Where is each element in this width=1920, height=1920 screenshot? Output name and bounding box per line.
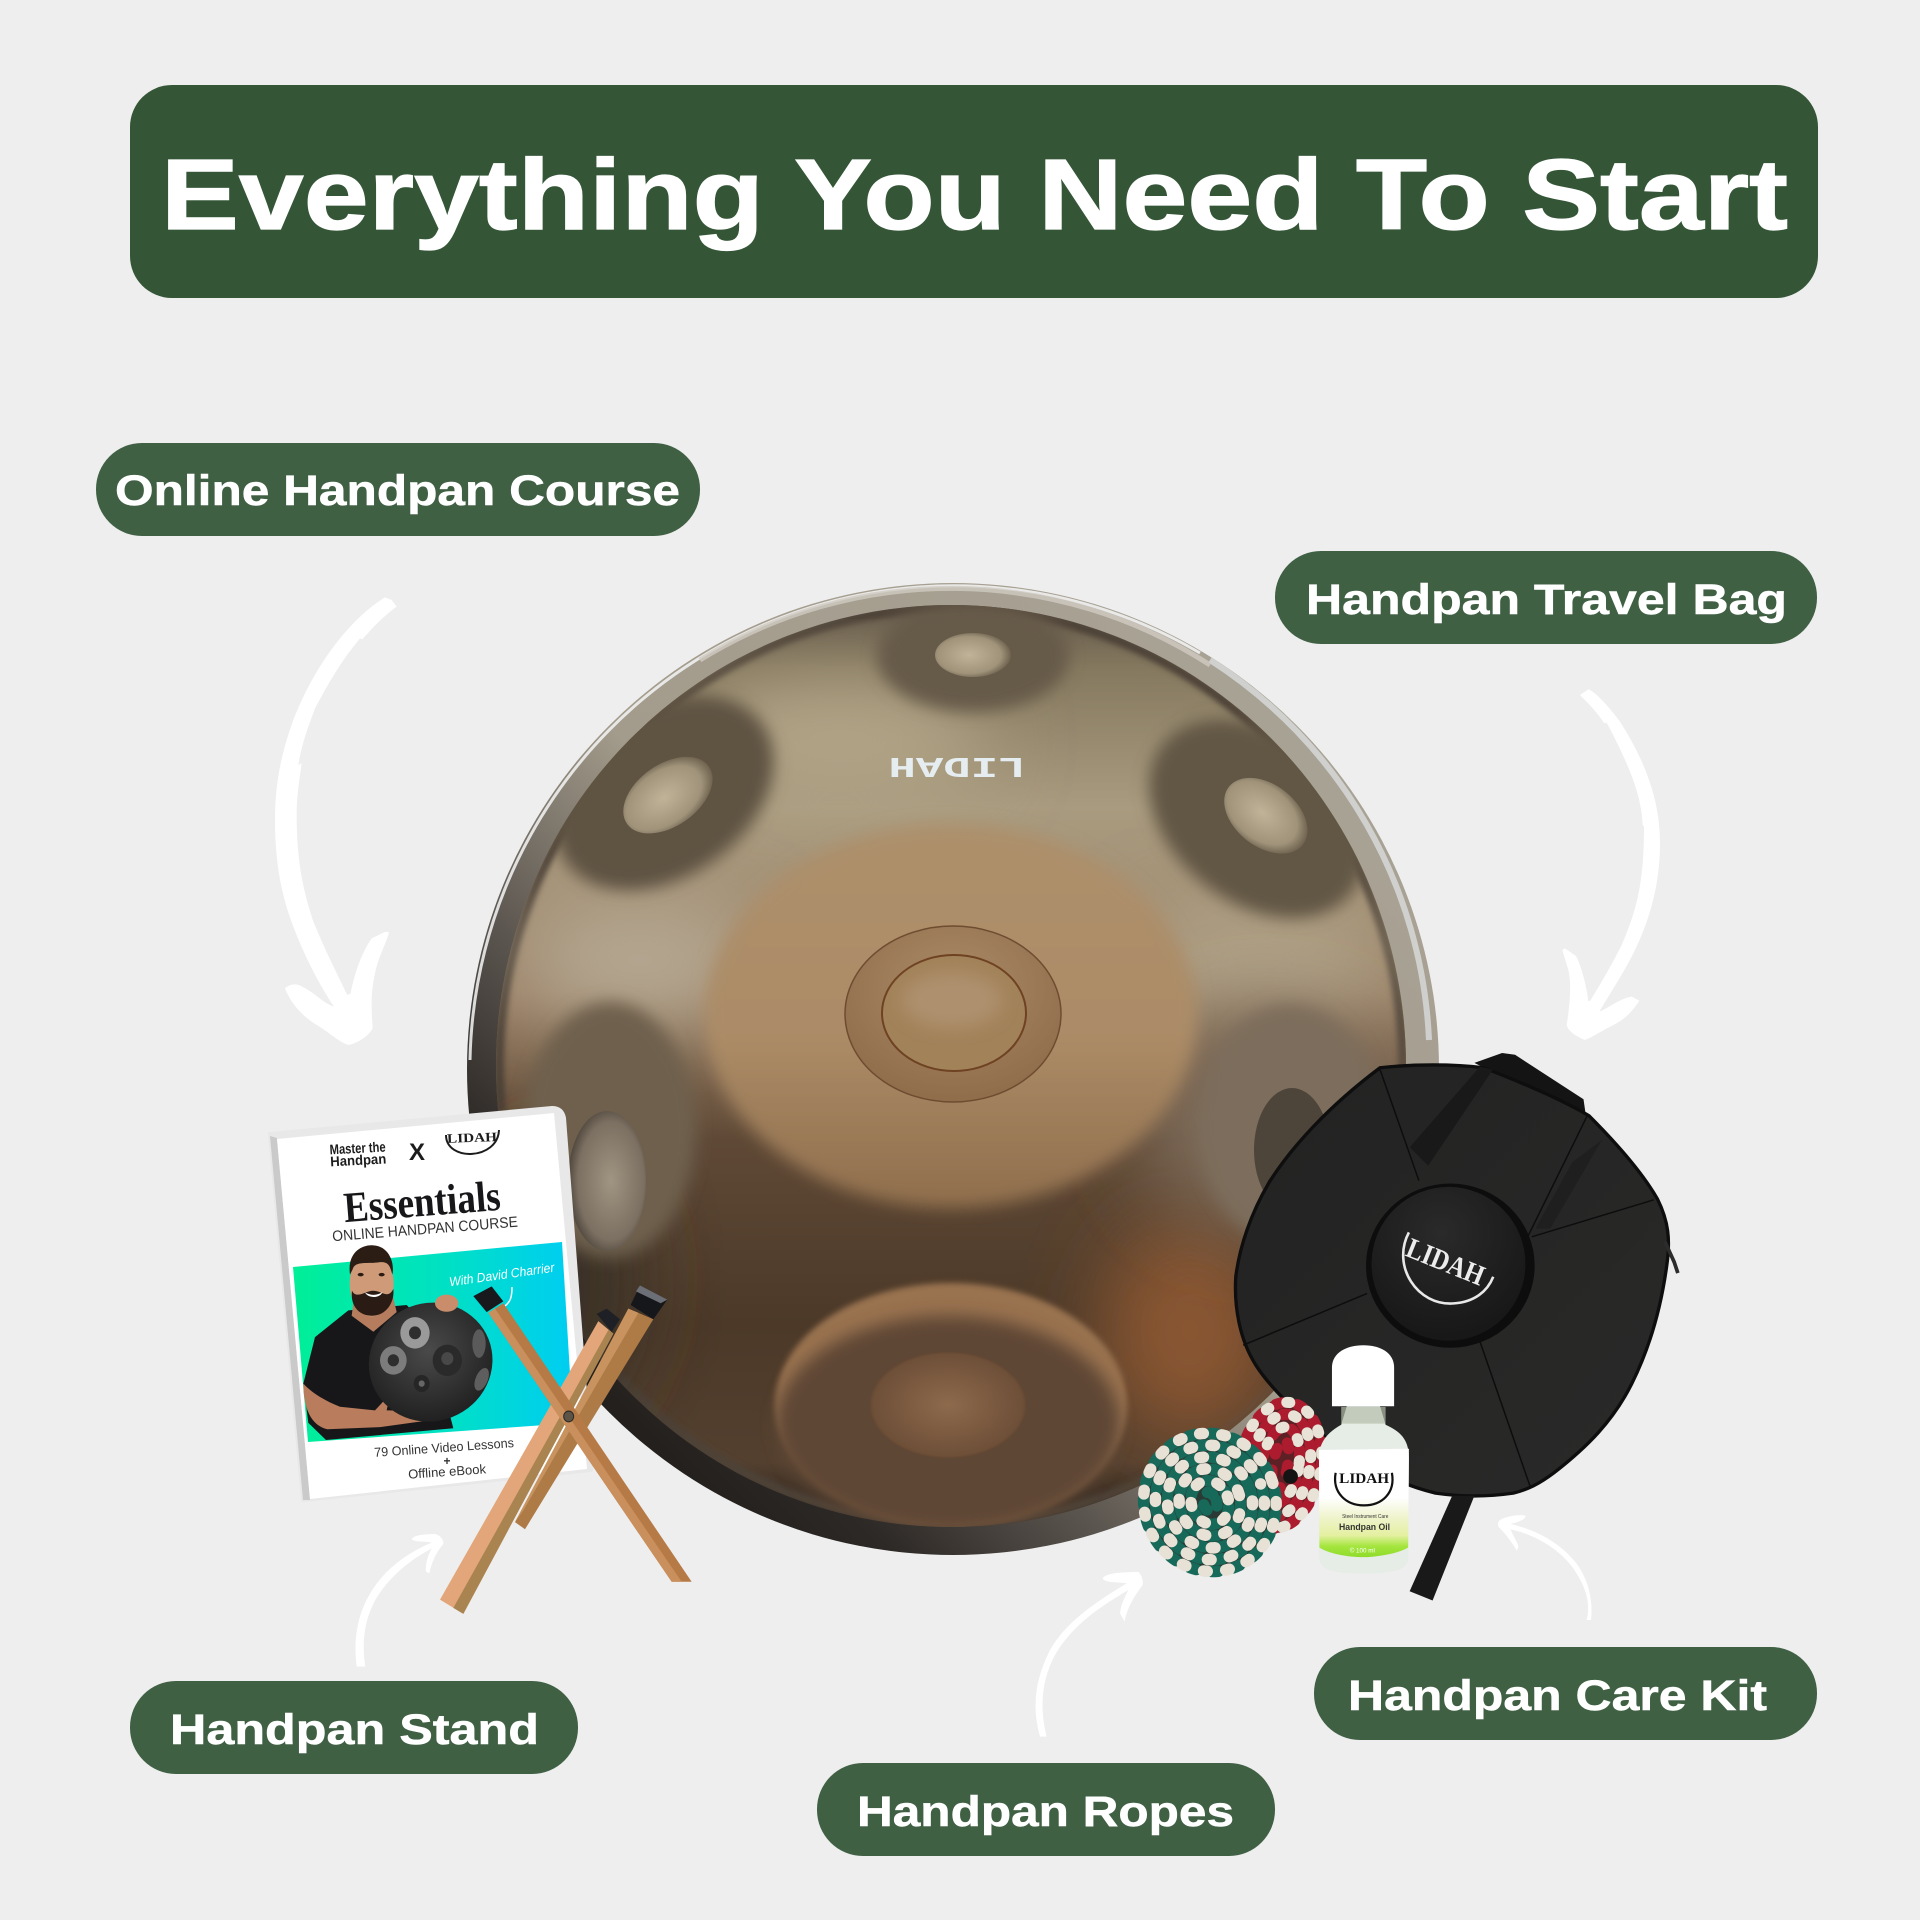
booklet heading: Essentials <box>342 1173 502 1232</box>
label: handpan care kit: Handpan Care Kit <box>1348 1672 1767 1720</box>
booklet logo: Master the Handpan: Handpan <box>330 1150 387 1169</box>
bottle logo <box>1335 1471 1392 1505</box>
icon: handpan travel bag <box>1235 1053 1678 1600</box>
arrow: handpan stand <box>356 1534 443 1667</box>
arrow: travel bag <box>1562 689 1660 1040</box>
booklet caption <box>374 1435 515 1482</box>
label: handpan travel bag: Handpan Travel Bag <box>1306 576 1787 624</box>
booklet logo: LIDAH <box>446 1129 499 1154</box>
right note <box>1208 1001 1360 1233</box>
arrow: online course <box>275 597 397 1045</box>
centre shoulder <box>705 824 1197 1208</box>
booklet logo: Master the Handpan: Master the <box>329 1138 386 1157</box>
panel: online course booklet <box>270 1108 591 1500</box>
label: handpan stand: Handpan Stand <box>170 1706 539 1754</box>
label: handpan care kit <box>1314 1647 1817 1740</box>
icon: handpan instrument <box>467 583 1439 1555</box>
booklet caption: 79 Online Video Lessons <box>374 1435 515 1460</box>
booklet logo: Master the Handpan <box>329 1138 387 1169</box>
red rope <box>1224 1390 1336 1541</box>
arrow: handpan care kit <box>1498 1515 1592 1620</box>
icon: wooden handpan stand <box>440 1285 692 1614</box>
upper right note <box>1141 713 1363 928</box>
booklet caption: + <box>443 1454 451 1468</box>
label: handpan ropes <box>817 1763 1275 1856</box>
booklet subheading: ONLINE HANDPAN COURSE <box>332 1214 518 1245</box>
bottle text: © 100 ml <box>1350 1546 1375 1554</box>
booklet gradient band <box>293 1242 573 1442</box>
arrow: handpan ropes <box>1036 1572 1143 1737</box>
label: online handpan course: Online Handpan Course <box>115 467 680 515</box>
top note <box>877 600 1069 712</box>
bag logo: LIDAH <box>1402 1232 1489 1292</box>
booklet logo: LIDAH: LIDAH <box>447 1129 497 1146</box>
bottle text <box>1339 1514 1390 1554</box>
label: handpan ropes: Handpan Ropes <box>857 1788 1234 1836</box>
bottle logo: LIDAH <box>1339 1471 1390 1487</box>
booklet byline <box>448 1260 556 1306</box>
icon: handpan oil bottle <box>1319 1345 1409 1573</box>
bottle text: Steel Instrument Care <box>1342 1514 1388 1520</box>
title banner: Everything You Need To Start <box>161 139 1788 251</box>
label: online handpan course <box>96 443 700 536</box>
booklet logo: X: X <box>409 1139 425 1166</box>
label: handpan stand <box>130 1681 578 1774</box>
bottom note <box>775 1283 1127 1532</box>
booklet photo: teacher with handpan <box>303 1245 501 1440</box>
green rope <box>1119 1409 1301 1596</box>
centre ding <box>845 926 1061 1102</box>
bottle text: Handpan Oil <box>1339 1522 1390 1532</box>
booklet caption: Offline eBook <box>408 1461 487 1482</box>
upper left note <box>556 689 783 900</box>
left note <box>524 1002 696 1258</box>
brand mark on handpan: LIDAH <box>888 749 1026 782</box>
icon: handpan ropes <box>1119 1390 1336 1596</box>
label: handpan travel bag <box>1275 551 1817 644</box>
booklet byline: With David Charrier <box>448 1260 556 1289</box>
title banner <box>130 85 1818 298</box>
